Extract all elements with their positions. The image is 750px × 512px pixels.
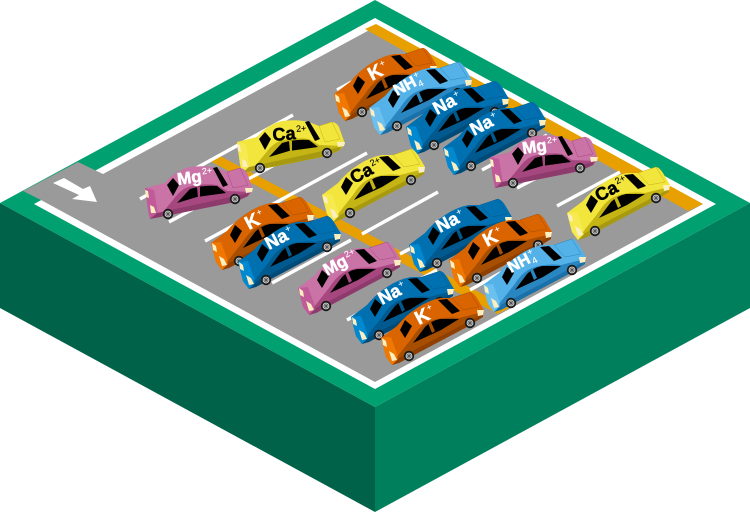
car: Ca2+ far right: Ca	[591, 177, 621, 206]
car: Na+ top row two: +	[488, 109, 498, 120]
car: Ca2+ far right	[567, 167, 670, 240]
car: K+ bottom: K	[411, 304, 433, 329]
white boundary line of the car park	[34, 18, 716, 389]
entrance direction arrow	[53, 178, 97, 202]
car: Na+ top row one	[406, 81, 509, 154]
car: NH4+ top: +	[411, 69, 421, 80]
car: Na+ middle	[409, 199, 512, 272]
car: Ca2+ centre	[322, 149, 425, 222]
car: K+ middle	[449, 214, 552, 287]
platform: right side face	[375, 203, 750, 512]
car: NH4+ bottom: NH	[505, 251, 533, 277]
car: Mg2+ right: Mg	[521, 136, 548, 158]
car: Na+ top row two: Na	[466, 111, 496, 140]
car: Na+ bottom	[351, 271, 454, 344]
car: Na+ bottom: Na	[374, 280, 404, 309]
car: Na+ left: Na	[261, 225, 291, 254]
car: K+ top: +	[377, 57, 387, 69]
car: Ca2+ upper left: 2+	[296, 123, 307, 134]
car: Ca2+ centre: Ca	[346, 159, 376, 188]
car: K+ middle: +	[492, 223, 502, 235]
car: Na+ left: +	[283, 223, 293, 234]
platform: left side face	[0, 203, 375, 512]
car: Na+ middle: +	[454, 206, 464, 217]
car: K+ left	[211, 197, 314, 270]
car: K+ bottom	[381, 292, 484, 365]
car: NH4+ top: 4	[416, 78, 425, 89]
car: K+ middle: K	[479, 226, 501, 251]
car: K+ left: K	[241, 209, 263, 234]
car: Mg2+ right	[490, 134, 598, 188]
car: Ca2+ far right: 2+	[613, 173, 627, 186]
platform: green top surface	[0, 0, 750, 407]
car: NH4+ bottom: 4	[530, 255, 539, 266]
car: K+ top	[334, 48, 437, 121]
car: NH4+ top	[369, 62, 472, 135]
car: Ca2+ upper left: Ca	[272, 123, 296, 145]
car: Ca2+ upper left	[237, 120, 345, 173]
car: K+ left: +	[254, 206, 264, 218]
car: Mg2+ centre: 2+	[343, 246, 356, 260]
car: NH4+ top: NH	[391, 74, 419, 100]
car: Na+ left	[238, 216, 341, 289]
orange strip: middle divider	[208, 155, 509, 314]
car: Mg2+ right: 2+	[546, 134, 558, 145]
car: Na+ top row two	[443, 102, 546, 175]
car: Mg2+ left: 2+	[201, 165, 213, 176]
car: Mg2+ left: Mg	[176, 167, 203, 189]
car: Ca2+ centre: 2+	[368, 155, 382, 168]
car: K+ top: K	[364, 60, 386, 85]
parking bay lines	[140, 72, 620, 320]
car: Mg2+ centre: Mg	[320, 251, 351, 280]
car: Na+ bottom: +	[396, 278, 406, 289]
car: K+ bottom: +	[424, 301, 434, 313]
car: NH4+ bottom: +	[525, 246, 535, 257]
car: Na+ top row one: +	[451, 88, 461, 99]
car: Mg2+ left	[145, 165, 253, 219]
orange strip: upper right edge	[365, 24, 703, 211]
grey parking surface with entrance	[23, 27, 703, 382]
car: Mg2+ centre	[298, 242, 401, 315]
car: NH4+ bottom	[483, 239, 586, 312]
car: Na+ middle: Na	[432, 208, 462, 237]
car: Na+ top row one: Na	[429, 90, 459, 119]
